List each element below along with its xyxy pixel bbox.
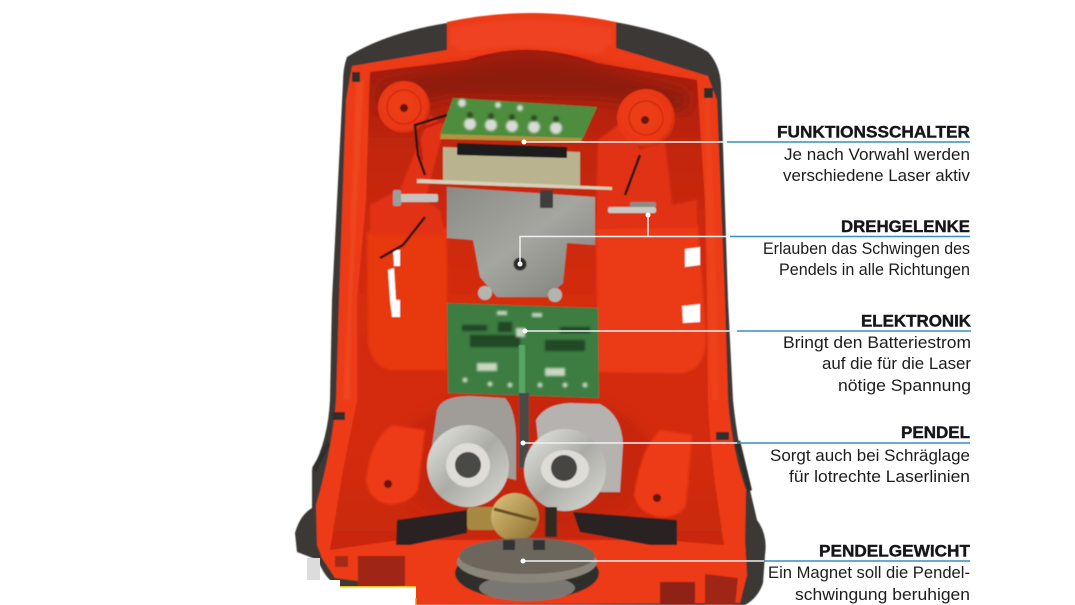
dark red inner cavity (330, 50, 724, 550)
label: Funktionsschalter: Je nach Vorwahl werden (784, 145, 970, 164)
right pendulum cylinder (524, 403, 623, 511)
label: Pendel: PENDEL (901, 424, 970, 442)
label: Funktionsschalter (777, 124, 970, 185)
leader: Funktionsschalter (522, 140, 970, 144)
lower right boss (634, 430, 692, 517)
upper left boss (378, 81, 430, 133)
left pendulum cylinder (427, 396, 516, 507)
label: Pendelgewicht: Ein Magnet soll die Pendel- (768, 563, 970, 582)
label: Pendel: Sorgt auch bei Schräglage (770, 446, 970, 465)
pendulum weight disc (455, 538, 599, 601)
white window openings (388, 247, 700, 323)
leader: Elektronik (522, 328, 971, 334)
mid-right panel (596, 225, 706, 373)
dark crossbars (396, 510, 677, 545)
right struts (596, 120, 697, 228)
dark outer shell (295, 22, 766, 605)
wires (380, 115, 640, 258)
mid-left panel (367, 228, 447, 370)
leader: Pendel (520, 440, 970, 446)
label: Drehgelenke: DREHGELENKE (841, 218, 970, 236)
label: Drehgelenke: Pendels in alle Richtungen (779, 260, 970, 279)
bottom right foot openings (660, 574, 738, 605)
right rim highlight (704, 92, 719, 400)
pendulum arm (519, 393, 529, 468)
leader: Drehgelenke (518, 212, 970, 266)
gray pendulum frame (447, 187, 595, 302)
label: Elektronik: auf die für die Laser (822, 354, 971, 373)
left strut (370, 115, 445, 235)
leader: Pendelgewicht (520, 558, 970, 564)
handle highlight (450, 20, 612, 55)
label: Drehgelenke: Erlauben das Schwingen des (763, 239, 970, 258)
lower cavity shade around weights (395, 390, 655, 530)
screw side part (545, 507, 557, 537)
red housing rim (316, 13, 747, 605)
device photo: opened laser housing (295, 13, 766, 605)
left rim highlight (343, 80, 364, 400)
switch circuit board (440, 98, 597, 142)
label: Elektronik: nötige Spannung (838, 376, 971, 395)
dark top shadow band (378, 60, 688, 112)
label: Elektronik (783, 312, 971, 395)
electronics circuit board (447, 303, 599, 398)
label: Pendelgewicht (768, 542, 970, 604)
label: Elektronik: Bringt den Batteriestrom (783, 333, 971, 352)
label: Pendel (770, 424, 970, 486)
switch housing (417, 143, 612, 190)
photo cut-out corner (307, 558, 416, 605)
upper right boss (617, 89, 675, 147)
label: Funktionsschalter: FUNKTIONSSCHALTER (777, 124, 970, 142)
housing notches (312, 72, 752, 492)
brass screw (467, 493, 539, 541)
pivot pin right (608, 202, 656, 213)
pivot pin left (393, 190, 438, 206)
label: Pendelgewicht: schwingung beruhigen (795, 585, 970, 604)
label: Pendelgewicht: PENDELGEWICHT (819, 542, 970, 560)
lower left boss (366, 425, 425, 504)
label: Elektronik: ELEKTRONIK (861, 312, 971, 330)
bottom left foot openings (335, 556, 405, 586)
label: Drehgelenke (763, 218, 970, 279)
label: Funktionsschalter: verschiedene Laser aktiv (783, 166, 970, 185)
label: Pendel: für lotrechte Laserlinien (789, 467, 970, 486)
